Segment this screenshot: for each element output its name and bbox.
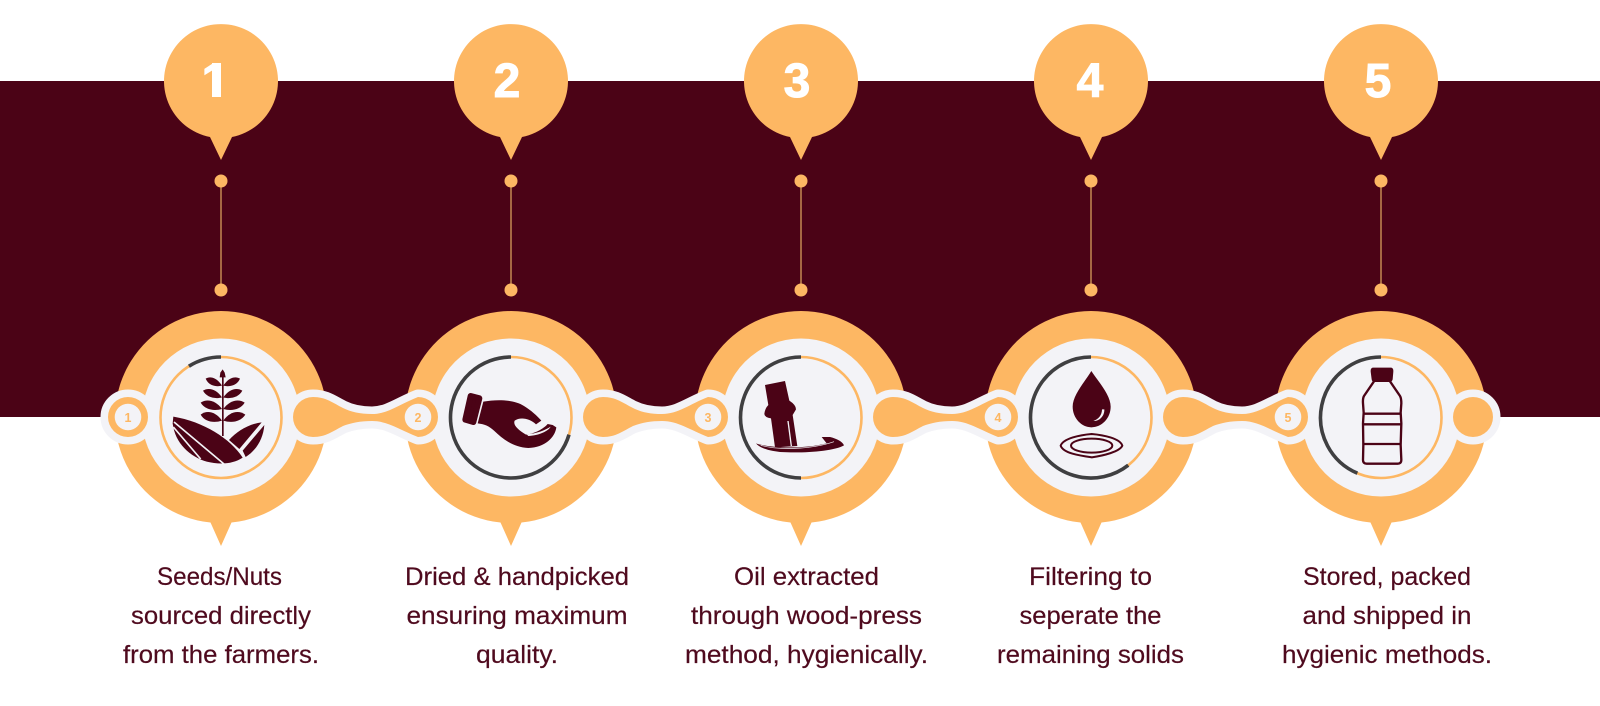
number 4: 4: [1077, 55, 1104, 108]
step 4 medallion: [985, 311, 1197, 546]
step 2 header: number balloon and stem: [454, 24, 568, 297]
pin body 3: [695, 311, 907, 546]
step 1 medallion: [115, 311, 327, 546]
number 5: 5: [1365, 55, 1391, 108]
caption 2: ensuring maximum: [406, 602, 628, 630]
connector outlines: [108, 397, 1493, 437]
step 4 header: number balloon and stem: [1034, 24, 1148, 297]
step 1 header: number balloon and stem: [164, 24, 278, 296]
progress ring 3: [740, 357, 862, 478]
progress ring 4: [1030, 357, 1152, 478]
link 1 to 2 with node 2: 2: [415, 411, 422, 425]
stem 2: [504, 174, 518, 296]
balloon 2: [454, 24, 568, 160]
balloon 1: [164, 24, 278, 160]
caption 5: and shipped in: [1302, 602, 1472, 630]
caption 2: quality.: [476, 641, 558, 669]
caption 1: [123, 563, 319, 669]
link 3 to 4 with node 4: [873, 397, 1018, 437]
link 4 to 5 with node 5: 5: [1285, 411, 1292, 425]
caption 1: Seeds/Nuts: [157, 563, 282, 591]
caption 2: Dried & handpicked: [405, 563, 629, 591]
connector chain with numbered nodes: [108, 397, 1493, 437]
link 4 to 5 with node 5: [1163, 397, 1308, 437]
node 1: 1: [125, 411, 132, 425]
icon: wood press and oil swirl: [756, 381, 844, 452]
step 5 medallion: [1275, 311, 1487, 546]
pin body 4: [985, 311, 1197, 546]
progress ring 2: [450, 357, 572, 478]
balloon 5: [1324, 24, 1438, 160]
inner disc 2: [432, 338, 590, 496]
caption 5: Stored, packed: [1303, 563, 1471, 591]
progress ring 5: [1320, 357, 1442, 478]
link 2 to 3 with node 3: [583, 397, 728, 437]
progress ring 1: [160, 357, 282, 478]
caption 3: Oil extracted: [734, 563, 879, 591]
caption 4: Filtering to: [1029, 563, 1152, 591]
step 3 header: number balloon and stem: [744, 24, 858, 296]
caption 3: [685, 563, 928, 669]
end node: [1453, 397, 1493, 437]
number 1: [204, 63, 221, 97]
link 3 to 4 with node 4: 4: [995, 411, 1002, 425]
caption 3: method, hygienically.: [685, 641, 928, 669]
step 5 header: number balloon and stem: [1324, 24, 1438, 297]
icon: hand: [465, 396, 556, 448]
caption 1: sourced directly: [131, 602, 312, 630]
inner disc 5: [1302, 338, 1460, 496]
inner disc 3: [722, 338, 880, 496]
number 1: 1: [202, 55, 228, 108]
caption 4: remaining solids: [997, 641, 1184, 669]
node 1: [108, 397, 148, 437]
balloon 4: [1034, 24, 1148, 160]
step 3 medallion: [695, 311, 907, 546]
icon: wheat and field: [173, 369, 264, 464]
caption 5: [1282, 563, 1492, 669]
maroon background band: [0, 81, 1600, 417]
stem 5: [1374, 174, 1388, 296]
caption 3: through wood-press: [691, 602, 922, 630]
inner disc 4: [1012, 338, 1170, 496]
caption 4: [997, 563, 1184, 669]
pin body 1: [115, 311, 327, 546]
stem 1: [214, 174, 228, 296]
link 1 to 2 with node 2: [293, 397, 438, 437]
caption 2: [405, 563, 629, 669]
caption 1: from the farmers.: [123, 641, 319, 669]
icon: oil drop and ripple: [1061, 371, 1122, 457]
balloon 3: [744, 24, 858, 160]
pin body 5: [1275, 311, 1487, 546]
icon: bottle: [1363, 368, 1401, 464]
inner disc 1: [142, 338, 300, 496]
stem 4: [1084, 174, 1098, 296]
caption 4: seperate the: [1020, 602, 1162, 630]
stem 3: [794, 174, 808, 296]
caption 5: hygienic methods.: [1282, 641, 1492, 669]
step 2 medallion: [405, 311, 617, 546]
number 3: 3: [784, 55, 810, 108]
link 2 to 3 with node 3: 3: [705, 411, 712, 425]
number 2: 2: [494, 55, 520, 108]
pin body 2: [405, 311, 617, 546]
